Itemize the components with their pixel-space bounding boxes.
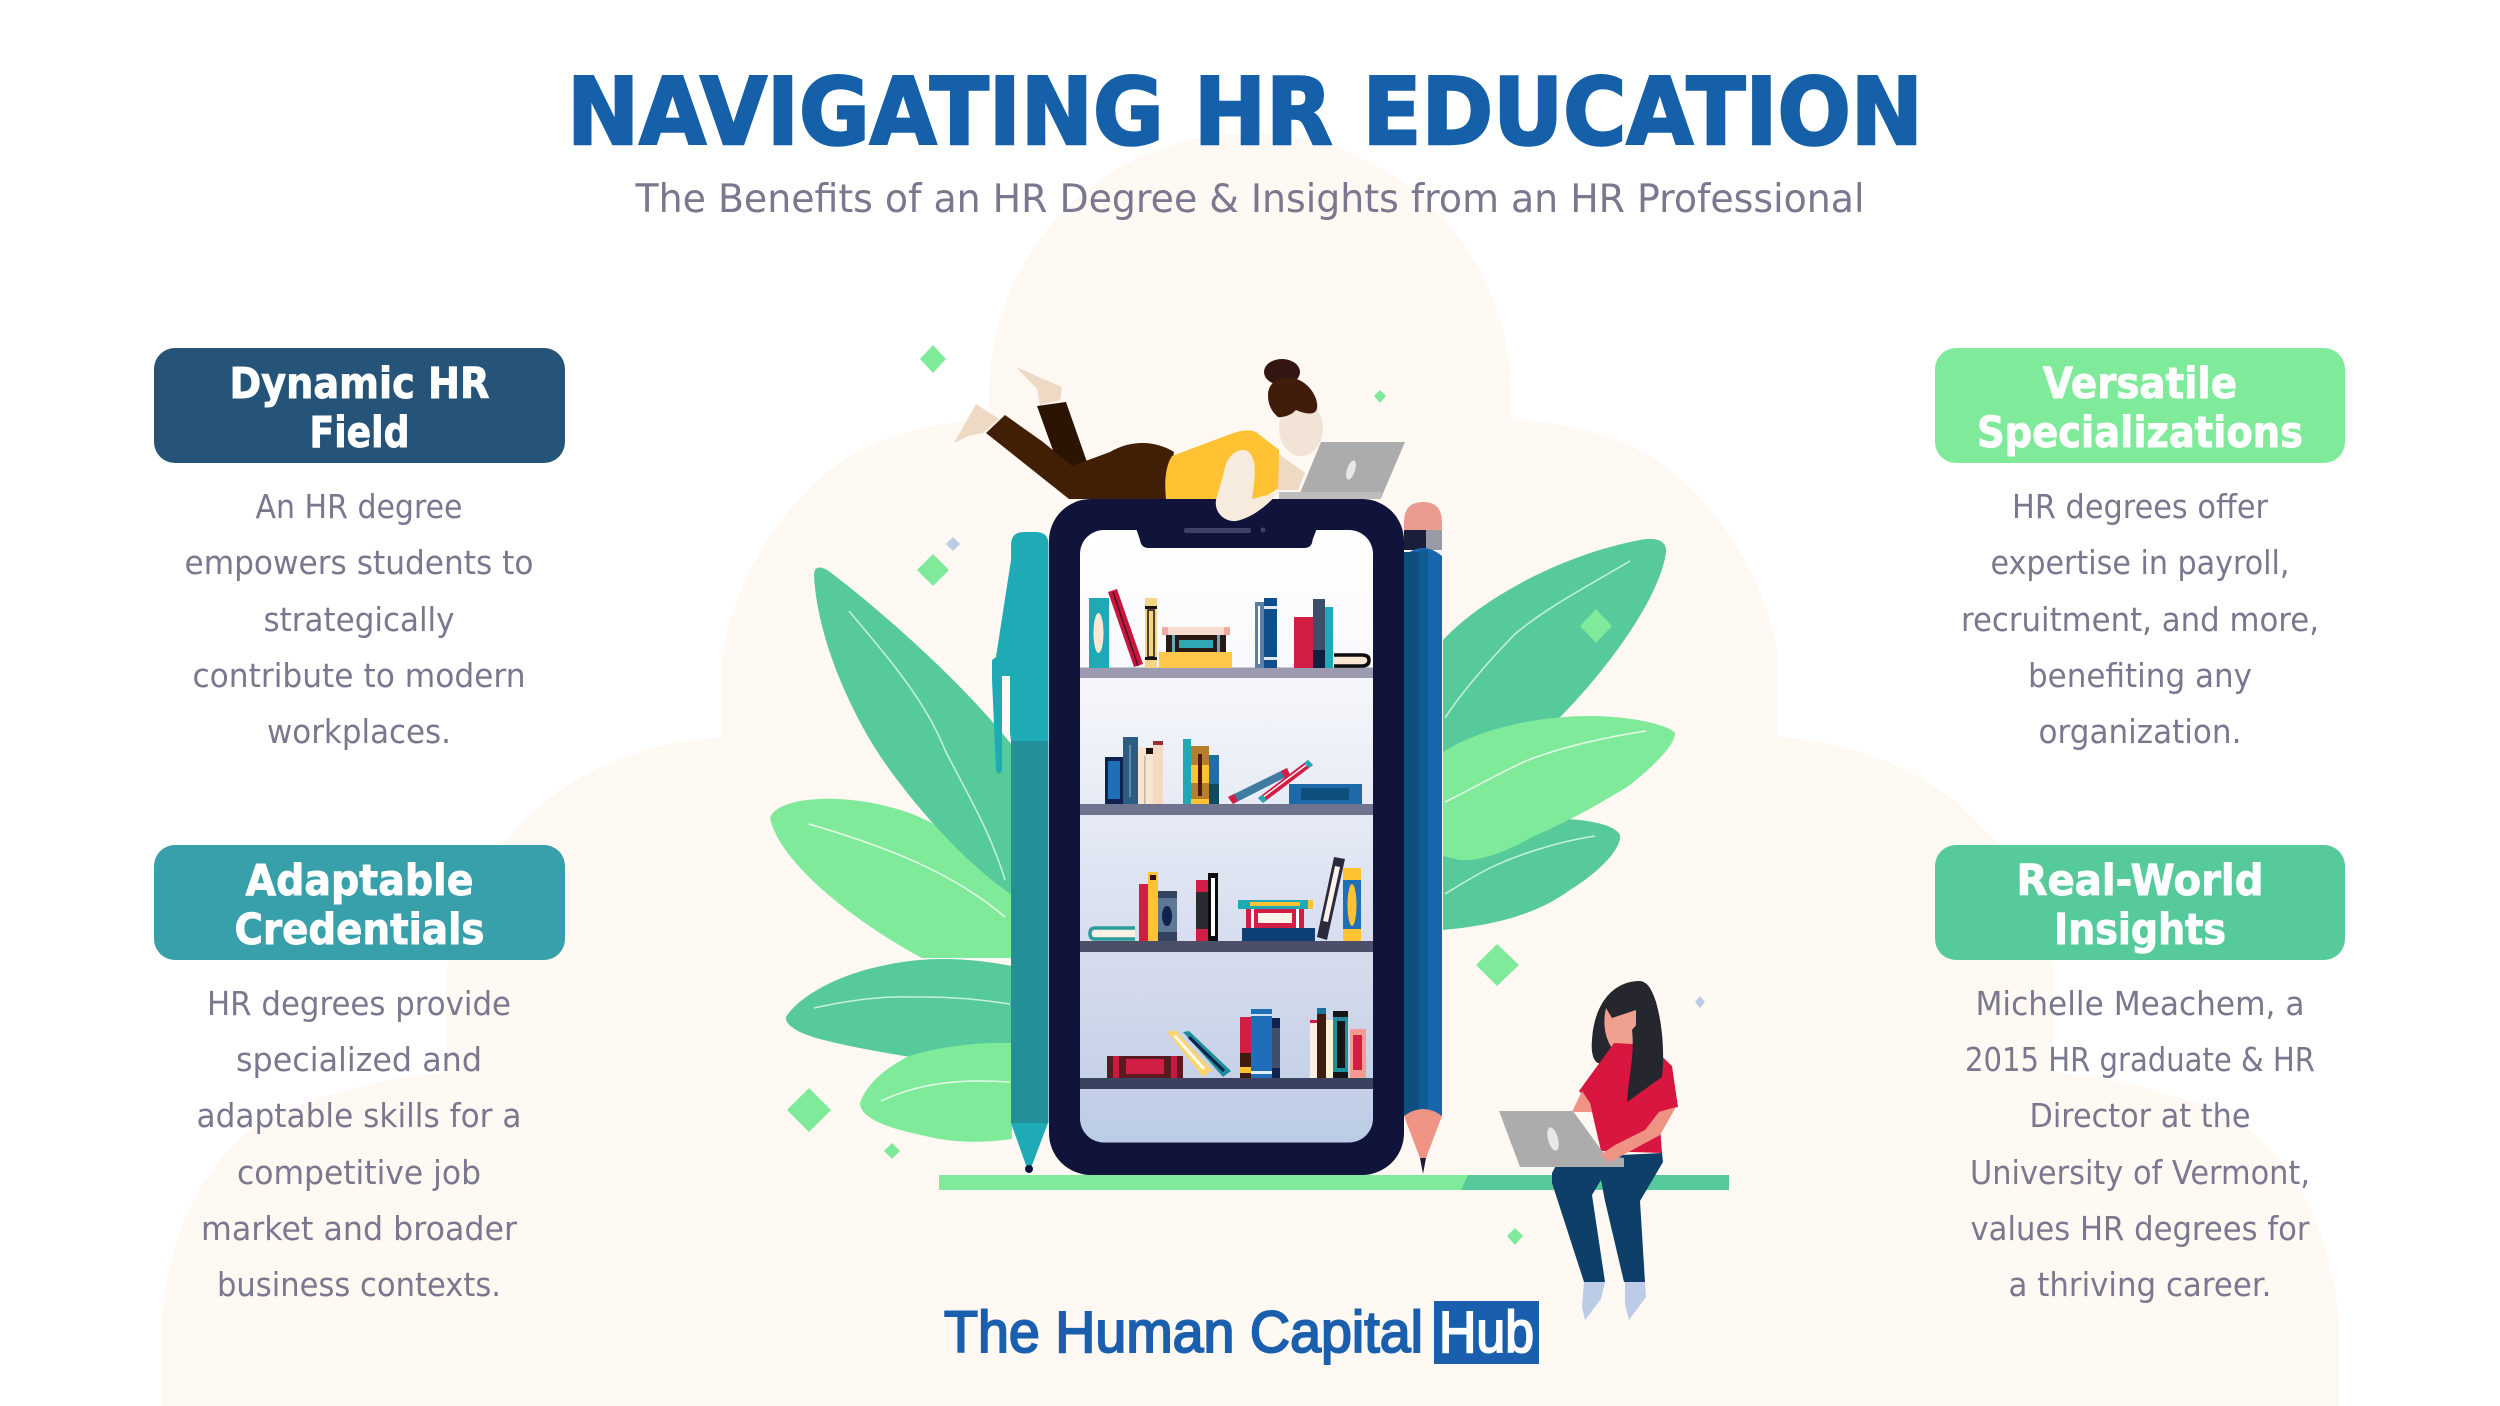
- body text: Dynamic HR Field: contribute to modern: [192, 656, 526, 695]
- logo: The Human Capital Hub: Hub: [1439, 1300, 1534, 1365]
- heading card: Real-World Insights: Insights: [2054, 905, 2226, 955]
- heading card: Versatile Specializations: Specializations: [1977, 408, 2303, 458]
- heading card: Real-World Insights: [1935, 845, 2345, 960]
- laptop: lying woman: [1279, 442, 1405, 499]
- books: shelf 3: [1090, 857, 1361, 941]
- leaves: right plant: [1443, 539, 1675, 1000]
- heading card: Dynamic HR Field: Dynamic HR: [230, 359, 490, 409]
- body text: Real-World Insights: Michelle Meachem, a: [1976, 984, 2304, 1023]
- blue pencil: [1404, 502, 1442, 1174]
- body text: Versatile Specializations: expertise in payroll,: [1990, 543, 2290, 582]
- body text: Dynamic HR Field: strategically: [264, 600, 454, 639]
- body text: Adaptable Credentials: HR degrees provide: [207, 984, 511, 1023]
- teal pen: [992, 532, 1048, 1173]
- body text: Adaptable Credentials: competitive job: [237, 1153, 481, 1192]
- body text: Adaptable Credentials: market and broader: [201, 1209, 517, 1248]
- body text: Adaptable Credentials: business contexts.: [217, 1265, 501, 1304]
- body text: Dynamic HR Field: An HR degree: [256, 487, 462, 526]
- body text: Real-World Insights: [1965, 984, 2315, 1304]
- phone body: [1049, 499, 1404, 1175]
- body text: Versatile Specializations: [1961, 487, 2319, 751]
- body text: Adaptable Credentials: [196, 984, 522, 1304]
- body text: Real-World Insights: 2015 HR graduate & HR: [1965, 1040, 2315, 1079]
- heading card: Dynamic HR Field: [154, 348, 565, 463]
- body text: Real-World Insights: Director at the: [2030, 1096, 2250, 1135]
- body text: Versatile Specializations: HR degrees offer: [2012, 487, 2268, 526]
- illustration: bookshelf phone scene: [770, 345, 1729, 1320]
- books: shelf 4: [1107, 1008, 1366, 1078]
- body text: Real-World Insights: a thriving career.: [2008, 1265, 2272, 1304]
- title: NAVIGATING HR EDUCATION: [567, 58, 1923, 166]
- heading card: Dynamic HR Field: Field: [310, 408, 410, 458]
- laptop: sitting woman: [1499, 1111, 1624, 1167]
- heading card: Adaptable Credentials: [154, 845, 565, 960]
- body text: Adaptable Credentials: adaptable skills for a: [196, 1096, 522, 1135]
- panel: Real-World Insights: [1935, 845, 2345, 1304]
- body text: Dynamic HR Field: empowers students to: [184, 543, 534, 582]
- heading card: Adaptable Credentials: Adaptable: [246, 856, 474, 906]
- books: shelf 2: [1105, 737, 1362, 804]
- heading card: Versatile Specializations: Versatile: [2043, 359, 2237, 409]
- body text: Real-World Insights: University of Vermont,: [1970, 1153, 2310, 1192]
- heading card: Adaptable Credentials: Credentials: [234, 905, 484, 955]
- woman lying on phone with laptop: [954, 359, 1405, 521]
- background cloud shape: [161, 133, 2339, 1406]
- panel: Dynamic HR Field: [154, 348, 565, 751]
- subtitle: The Benefits of an HR Degree & Insights from an HR Professional: [635, 177, 1865, 222]
- icon: sparkle diamonds: [787, 345, 1705, 1245]
- woman sitting with laptop: [1499, 981, 1678, 1320]
- body text: Versatile Specializations: organization.: [2038, 712, 2242, 751]
- heading card: Real-World Insights: Real-World: [2016, 856, 2264, 906]
- body text: Versatile Specializations: benefiting any: [2028, 656, 2252, 695]
- body text: Real-World Insights: values HR degrees for: [1970, 1209, 2310, 1248]
- logo: The Human Capital Hub: The Human Capital: [944, 1300, 1423, 1365]
- panel: Versatile Specializations: [1935, 348, 2345, 751]
- heading card: Versatile Specializations: [1935, 348, 2345, 463]
- ground bar: [939, 1175, 1729, 1190]
- body text: Adaptable Credentials: specialized and: [236, 1040, 482, 1079]
- body text: Dynamic HR Field: workplaces.: [267, 712, 451, 751]
- socks: [1582, 1282, 1646, 1320]
- body text: Dynamic HR Field: [184, 487, 534, 751]
- panel: Adaptable Credentials: [154, 845, 565, 1304]
- books: shelf 1: [1089, 589, 1369, 668]
- phone notch: [1136, 528, 1317, 548]
- leaves: left plant: [770, 567, 1012, 1142]
- body text: Versatile Specializations: recruitment, and more,: [1961, 600, 2319, 639]
- bookshelf boards: [1080, 668, 1373, 1089]
